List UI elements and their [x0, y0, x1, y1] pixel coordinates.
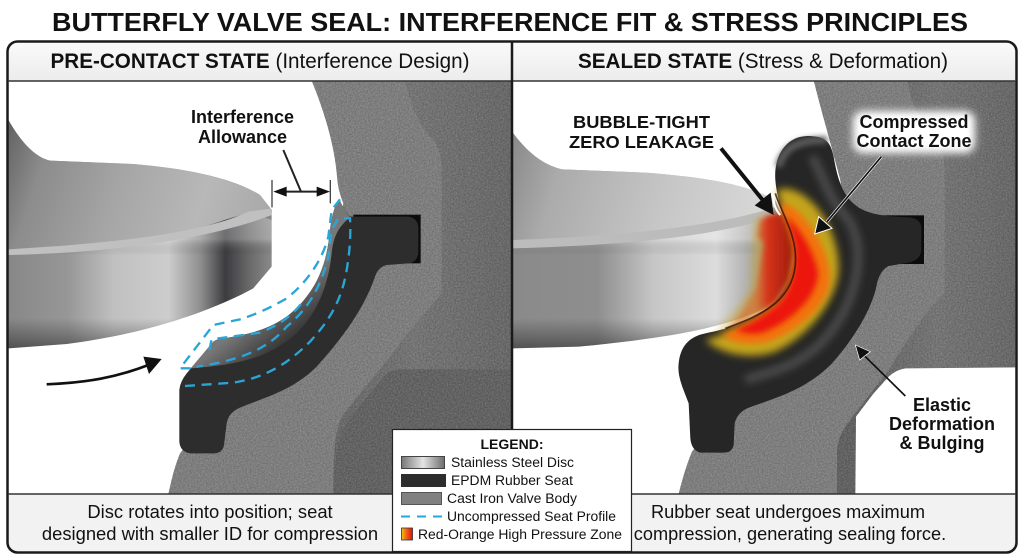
valve cross-section: sealed — [512, 81, 1016, 494]
caption: pre-contact: designed with smaller ID for compression — [42, 523, 378, 544]
valve cross-section: pre-contact — [8, 81, 512, 494]
label: interference allowance: Allowance — [198, 127, 287, 147]
rotation arrow — [47, 357, 162, 384]
rubber seat, deformed — [678, 136, 921, 453]
high pressure zone: on seat — [705, 189, 839, 356]
caption: sealed — [512, 494, 1016, 551]
panel: pre-contact state — [8, 42, 512, 494]
label: compressed contact zone: Compressed — [859, 112, 969, 132]
cast iron body: lower casting — [356, 370, 486, 493]
label: bubble-tight — [570, 116, 714, 148]
panel heading: pre-contact — [8, 42, 512, 81]
disc: stainless steel — [8, 120, 272, 348]
cast iron body: section — [679, 81, 945, 494]
legend title: LEGEND: — [480, 436, 544, 452]
cast iron body: dark outer wall — [869, 82, 1016, 396]
caption: sealed: compression, generating sealing force. — [634, 524, 946, 544]
label: bubble-tight: BUBBLE-TIGHT — [573, 112, 710, 132]
label: bubble-tight: ZERO LEAKAGE — [569, 132, 714, 152]
contact line — [725, 193, 796, 328]
seat pocket — [882, 215, 924, 264]
caption: pre-contact: Disc rotates into position; seat — [87, 501, 333, 522]
caption: sealed: Rubber seat undergoes maximum — [651, 502, 925, 522]
legend: rubber — [401, 473, 573, 489]
panel heading: sealed: SEALED STATE (Stress & Deformation) — [578, 50, 948, 73]
label: interference allowance: Interference — [191, 107, 294, 127]
legend: rubber: EPDM Rubber Seat — [451, 473, 573, 489]
legend — [392, 430, 632, 552]
rubber seat — [179, 199, 418, 453]
panel heading: pre-contact: PRE-CONTACT STATE (Interference Design) — [50, 50, 470, 73]
legend: steel: Stainless Steel Disc — [451, 455, 574, 471]
label: elastic deformation: & Bulging — [900, 433, 984, 453]
interference dimension — [272, 150, 330, 207]
legend: iron: Cast Iron Valve Body — [447, 491, 578, 507]
high pressure zone: on disc — [715, 212, 795, 333]
uncompressed seat profile: dashed — [180, 199, 350, 386]
panel: sealed state — [512, 42, 1016, 494]
legend: dashed profile: Uncompressed Seat Profile — [447, 509, 616, 525]
seat pocket — [353, 215, 421, 263]
caption: pre-contact — [8, 494, 512, 551]
cast iron body: section — [168, 81, 442, 494]
label: elastic deformation: Deformation — [889, 414, 995, 434]
panel heading: sealed — [512, 42, 1016, 81]
cast iron body: lower band — [837, 378, 884, 494]
arrow: leakage — [721, 148, 774, 215]
legend: pressure zone: Red-Orange High Pressure Zone — [418, 527, 622, 543]
label: elastic deformation: Elastic — [913, 395, 971, 415]
disc: stainless steel — [512, 132, 795, 348]
title: BUTTERFLY VALVE SEAL: INTERFERENCE FIT & STRESS PRINCIPLES — [52, 9, 968, 37]
glow behind compressed contact zone — [853, 111, 975, 153]
white seat edge at disc — [773, 194, 780, 215]
arrow: bulging — [855, 345, 905, 396]
cast iron body: dark outer wall — [317, 81, 512, 494]
arrow: compressed zone — [815, 157, 881, 234]
label: compressed contact zone: Contact Zone — [856, 131, 972, 151]
